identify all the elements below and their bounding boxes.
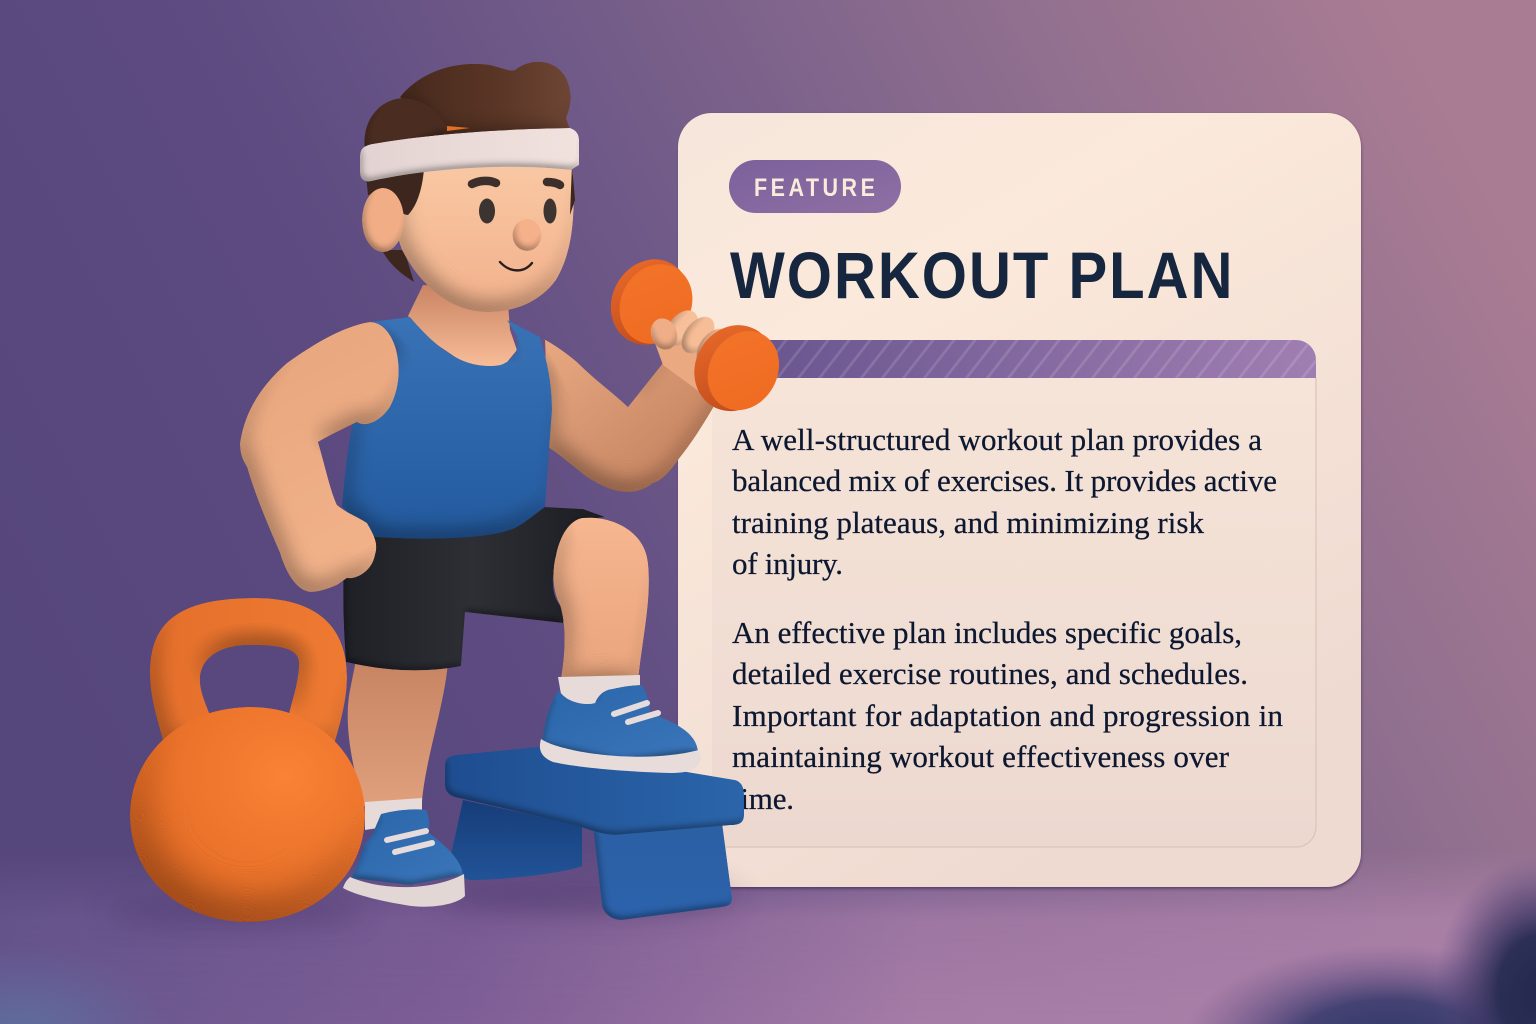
eyes: [479, 198, 556, 224]
step right leg: [593, 822, 732, 920]
text block: paragraph two: An effective plan includes specific goals,: [732, 615, 1242, 650]
shorts: [343, 507, 605, 670]
hair: left lobe: [364, 98, 448, 150]
tank top: [342, 317, 552, 539]
raised foot sneaker: [540, 675, 701, 773]
ear: [362, 188, 404, 252]
title: WORKOUT PLAN: [730, 240, 1232, 313]
right disc: [679, 311, 793, 427]
text block: paragraph one: of injury.: [732, 546, 843, 581]
head: [360, 62, 579, 312]
text block: paragraph one: training plateaus, and minimizing risk: [732, 505, 1204, 540]
sideburn: [366, 168, 424, 215]
neck: [408, 285, 517, 367]
striped header band: [712, 340, 1316, 378]
panel: inner text panel: [712, 340, 1316, 847]
text block: paragraph two: [732, 615, 1284, 816]
badge: FEATURE: [729, 160, 901, 213]
text block: paragraph one: [732, 422, 1277, 581]
step platform: [445, 747, 744, 920]
standing leg: [348, 655, 448, 806]
smile: [500, 262, 532, 270]
text block: paragraph two: time.: [732, 781, 794, 816]
illustration: character with equipment: [130, 62, 793, 922]
left arm: [240, 322, 399, 592]
headband: [360, 128, 579, 181]
eyebrows: [472, 181, 560, 185]
kettlebell: [130, 598, 365, 922]
text block: paragraph one: A well-structured workout plan provides a: [732, 422, 1262, 457]
panel: feature card: [678, 113, 1361, 888]
right arm: [542, 330, 735, 492]
hair: rear: [382, 250, 414, 282]
text block: paragraph one: balanced mix of exercises. It provides active: [732, 463, 1277, 498]
text block: paragraph two: Important for adaptation and progression in: [732, 698, 1284, 733]
dumbbell and hand: [596, 245, 793, 427]
nose: [512, 219, 542, 251]
face: [394, 160, 574, 312]
standing foot sneaker: [343, 798, 465, 907]
left disc: [596, 245, 707, 360]
ground shadow: [105, 880, 740, 926]
badge: FEATURE: FEATURE: [754, 174, 875, 201]
hair: top lobe: [400, 62, 572, 140]
step left leg: [451, 800, 582, 880]
hand and fingers: [646, 304, 736, 398]
text block: paragraph two: maintaining workout effectiveness over: [732, 739, 1230, 774]
step top: [445, 747, 744, 835]
raised leg: [553, 518, 649, 684]
text block: paragraph two: detailed exercise routines, and schedules.: [732, 656, 1248, 691]
